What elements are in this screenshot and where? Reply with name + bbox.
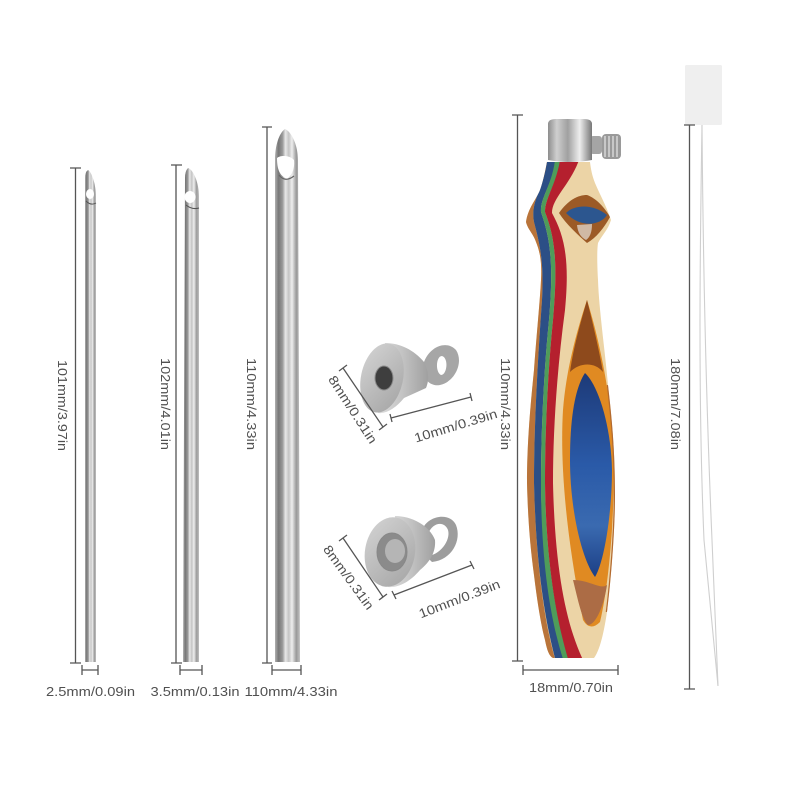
handle width dimension: 18mm/0.70in	[529, 680, 613, 695]
nut 1 face	[354, 339, 410, 417]
needle 3 width dimension: 110mm/4.33in	[244, 684, 338, 699]
wood blue stripe	[533, 160, 566, 662]
needle 2 height dimension: 102mm/4.01in	[158, 358, 173, 450]
lower eye blue	[570, 373, 612, 577]
wood brown edge	[526, 162, 555, 658]
handle metal cap	[548, 119, 592, 162]
threader	[668, 65, 722, 689]
handle set screw	[590, 134, 621, 159]
nut 1 ring	[423, 345, 459, 385]
needle 3 eye	[277, 156, 294, 179]
handle height dimension	[498, 115, 523, 661]
needle 3 height dimension: 110mm/4.33in	[244, 358, 259, 450]
metal eyelet nut 2	[320, 513, 502, 621]
lower eye brown bottom	[573, 580, 607, 625]
needle 3 shaft	[275, 129, 300, 662]
wood red stripe	[545, 160, 584, 662]
threader height dimension: 180mm/7.08in	[668, 358, 683, 450]
nut 1 width dimension: 8mm/0.31in	[325, 373, 380, 446]
needle 1 eye	[86, 189, 96, 204]
wood green stripe	[541, 160, 570, 662]
lower eye brown top	[570, 300, 603, 372]
lower eye outer	[562, 300, 614, 627]
needle 2 width dimension	[150, 665, 240, 699]
threader white tab	[685, 65, 722, 125]
needle 2 eye	[184, 191, 199, 209]
upper eye	[559, 195, 610, 243]
handle width dimension	[523, 665, 618, 695]
nut 2 body	[388, 516, 435, 587]
needle 2	[150, 165, 240, 699]
nut 1 body	[378, 343, 428, 413]
needle 2 width dimension: 3.5mm/0.13in	[150, 684, 240, 699]
needle 1 width dimension	[46, 665, 135, 699]
needle 1 height dimension: 101mm/3.97in	[55, 360, 70, 451]
nut 1 length dimension: 10mm/0.39in	[412, 406, 499, 445]
handle laminated wood body	[526, 162, 615, 658]
needle 3 width dimension	[244, 665, 338, 699]
nut 2 width dimension	[320, 535, 387, 613]
wooden handle	[498, 115, 621, 695]
nut 1 length dimension	[390, 393, 499, 445]
needle 2 height dimension	[158, 165, 182, 663]
nut 2 face	[359, 513, 421, 591]
nut 2 ring	[422, 517, 458, 562]
nut 1 width dimension	[325, 365, 387, 446]
nut 2 bore	[377, 533, 407, 571]
needle 2 shaft	[183, 168, 199, 662]
threader wires	[700, 125, 718, 686]
threader height dimension	[668, 125, 695, 689]
metal eyelet nut 1	[325, 339, 499, 446]
needle 3	[244, 127, 338, 699]
needle 3 height dimension	[244, 127, 272, 663]
needle 1 shaft	[85, 170, 96, 662]
nut 2 length dimension: 10mm/0.39in	[417, 576, 502, 621]
nut 2 width dimension: 8mm/0.31in	[320, 542, 377, 613]
needle 1 width dimension: 2.5mm/0.09in	[46, 684, 135, 699]
needle 1	[46, 168, 135, 699]
handle height dimension: 110mm/4.33in	[498, 358, 513, 450]
nut 1 bore	[375, 366, 393, 390]
needle 1 height dimension	[55, 168, 81, 663]
nut 2 length dimension	[392, 561, 502, 621]
handle right edge	[607, 385, 615, 612]
